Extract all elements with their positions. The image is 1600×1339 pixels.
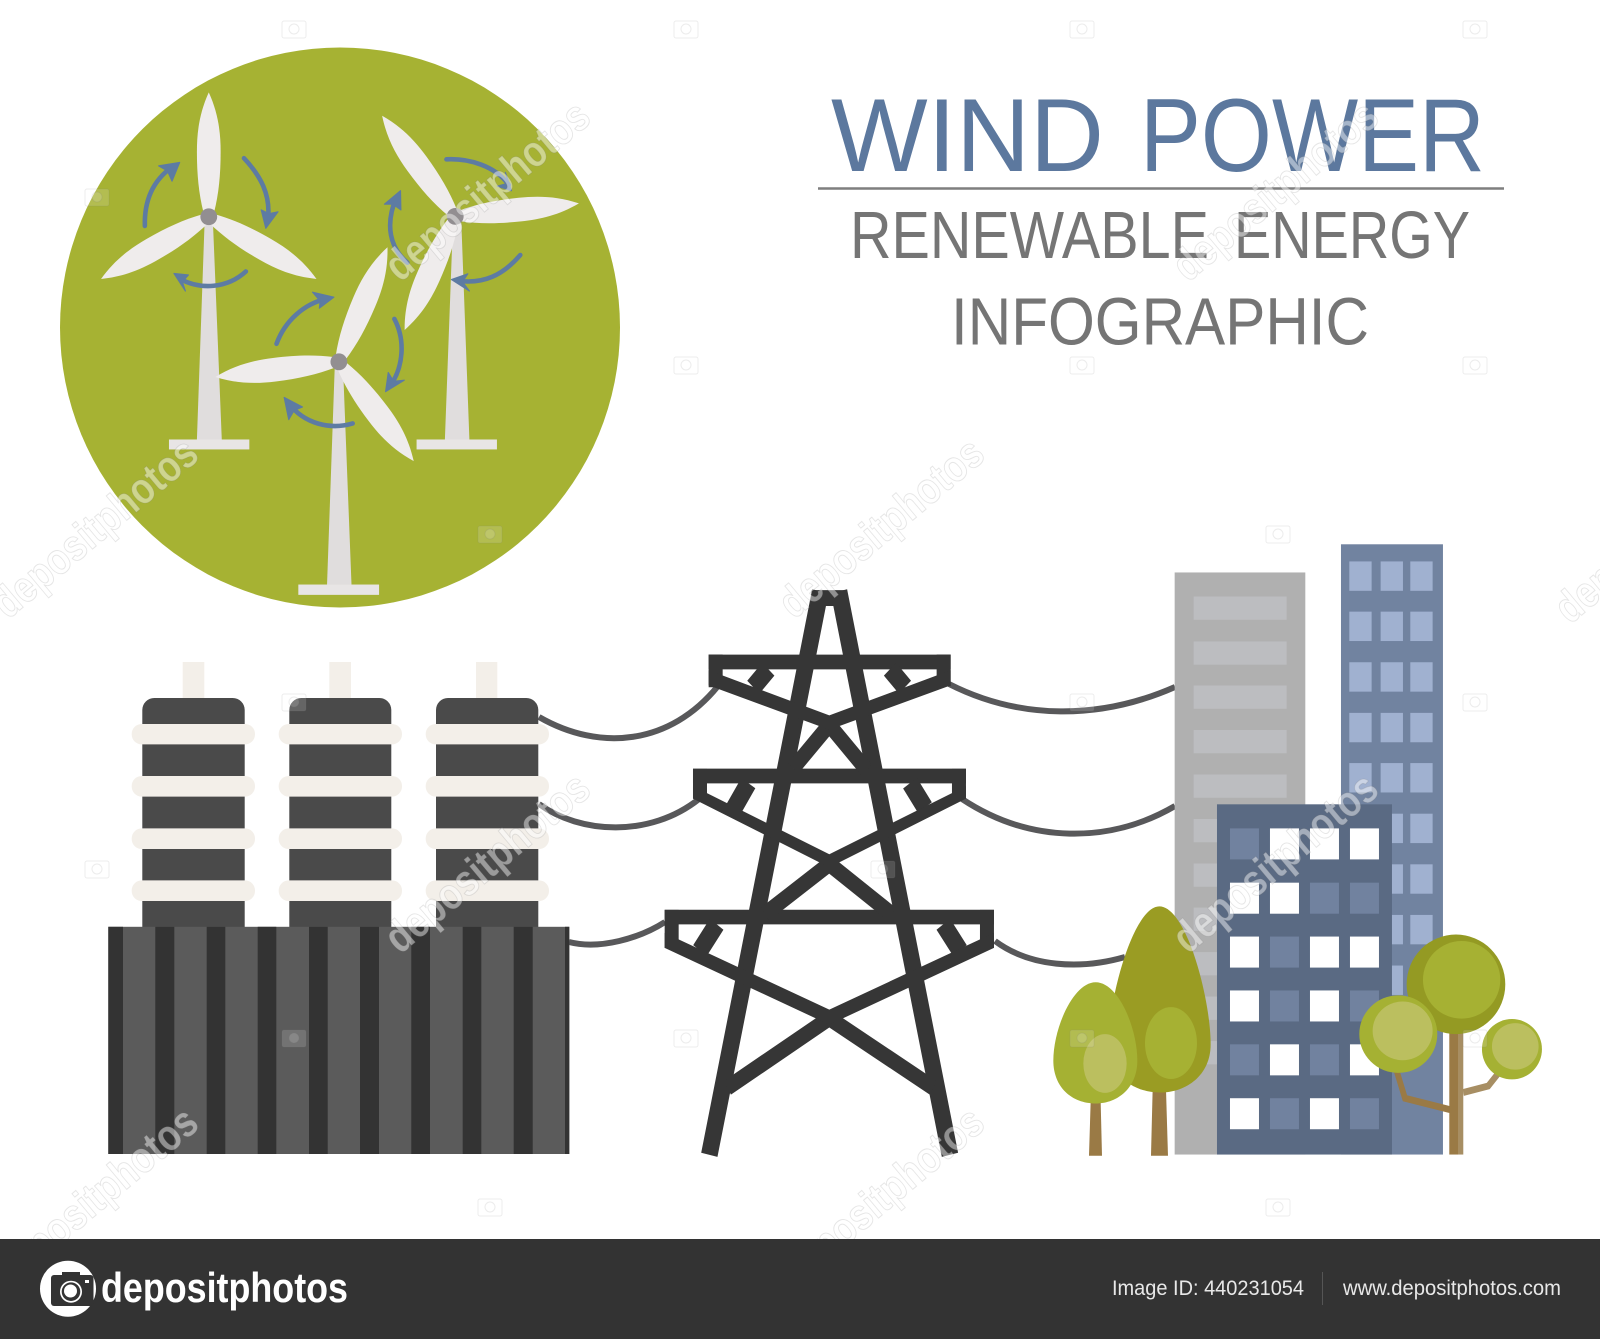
subtitle: renewable energy: RENEWABLE: [850, 198, 1209, 273]
title: wind power: POWER: [1140, 78, 1485, 194]
green circle background: [60, 48, 620, 608]
title: wind power: WIND: [831, 78, 1104, 194]
subtitle: renewable energy: ENERGY: [1234, 198, 1470, 273]
panel: wind turbines circle: [60, 48, 620, 608]
grey office tower: [1175, 572, 1305, 1155]
insulator rings: [132, 724, 549, 901]
image id: Image ID: 440231054: [1112, 1277, 1304, 1300]
transformer terminals: [183, 662, 497, 699]
rotation arrows: [145, 158, 520, 426]
watermarks: depositphotos: [769, 1097, 993, 1297]
power cables: [539, 684, 1175, 965]
watermarks: depositphotos: [1163, 91, 1387, 291]
electricity pylon: [665, 591, 994, 1155]
city skyline: [1053, 544, 1542, 1156]
front dark blue building: [1217, 804, 1392, 1155]
title block: [818, 78, 1504, 360]
watermarks: depositphotos: [769, 428, 993, 628]
round-crowned tree: [1359, 935, 1542, 1155]
subtitle: infographic: INFOGRAPHIC: [951, 284, 1369, 360]
tall tree: [1108, 906, 1211, 1156]
watermarks: depositphotos: [1163, 763, 1387, 963]
turbine: centre: [214, 243, 423, 595]
turbine: left: [95, 92, 322, 449]
website url: www.depositphotos.com: [1342, 1277, 1561, 1300]
transformer columns: [142, 698, 538, 927]
transformer station: [108, 662, 569, 1154]
brand name: depositphotos: [101, 1264, 348, 1311]
striped transformer base: [108, 927, 569, 1154]
watermarks: depositphotos: [375, 91, 599, 291]
depositphotos camera logo: [40, 1261, 96, 1317]
wind turbines group: [95, 92, 580, 595]
footer bar: [0, 1239, 1600, 1339]
tall blue tower: [1341, 544, 1443, 1155]
turbine: right: [373, 109, 580, 449]
small tree: [1053, 982, 1137, 1156]
watermarks: depositphotos: [375, 763, 599, 963]
